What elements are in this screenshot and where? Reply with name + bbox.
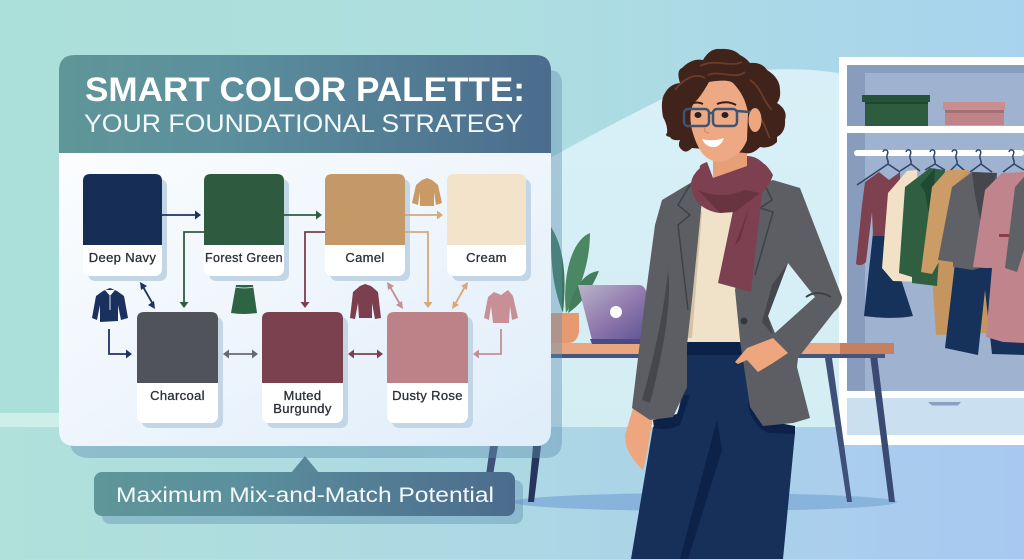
blazer side shading bbox=[762, 263, 788, 335]
arrow: camel to rose double bbox=[387, 282, 403, 309]
panel: palette bbox=[59, 55, 551, 446]
plant bbox=[551, 227, 599, 343]
hair back bbox=[662, 49, 786, 153]
eyebrows bbox=[690, 102, 736, 105]
burgundy top bbox=[856, 172, 902, 265]
top shadow bbox=[687, 206, 702, 338]
card: Muted Burgundy: Burgundy bbox=[273, 401, 332, 416]
arrow: rose blazer to dusty rose bbox=[473, 329, 501, 358]
card: Dusty Rose: Dusty Rose bbox=[392, 388, 463, 403]
drawer handle bbox=[928, 402, 961, 406]
wall base band bbox=[0, 413, 60, 428]
arrow: camel to rose bbox=[405, 232, 432, 308]
charcoal blazer collar bbox=[972, 172, 997, 220]
hangers bbox=[857, 150, 1024, 185]
camel front bbox=[921, 170, 968, 274]
pink box bbox=[943, 102, 1005, 125]
trouser under jacket shadow bbox=[653, 395, 795, 434]
arrow: navy to green bbox=[162, 210, 201, 220]
card: Deep Navy bbox=[83, 174, 162, 276]
card: Muted Burgundy: Muted bbox=[284, 388, 321, 403]
arrow: green to charcoal bbox=[180, 232, 204, 308]
panel body bbox=[59, 150, 551, 446]
card: Muted Burgundy bbox=[262, 312, 343, 423]
gap between arm and body bbox=[768, 263, 815, 333]
trousers bbox=[631, 340, 795, 559]
camel coat bbox=[921, 170, 990, 335]
cream jacket bbox=[882, 170, 922, 282]
card shadows bbox=[88, 179, 531, 428]
callout shadow bbox=[102, 480, 523, 524]
arrow: navy shirt to charcoal bbox=[109, 329, 132, 358]
card: Camel: Camel bbox=[345, 250, 385, 265]
arrow: charcoal and burgundy bbox=[223, 350, 258, 358]
right hand bbox=[735, 338, 788, 372]
floor bbox=[0, 427, 1024, 559]
panel shadow bbox=[70, 70, 562, 458]
dress belt bbox=[999, 234, 1024, 237]
callout box bbox=[94, 472, 515, 516]
glasses bbox=[684, 109, 750, 126]
nose bbox=[704, 128, 709, 133]
right charcoal jacket bbox=[1005, 177, 1024, 272]
face bbox=[690, 81, 748, 162]
cream top bbox=[686, 205, 741, 342]
card: Charcoal bbox=[137, 312, 218, 423]
card: Forest Green bbox=[204, 174, 284, 276]
plant pot bbox=[551, 313, 579, 343]
floor shadow bbox=[513, 493, 897, 511]
icon: rose blazer bbox=[484, 290, 518, 323]
navy skirt bbox=[864, 233, 913, 318]
wardrobe bbox=[839, 57, 1024, 445]
callout text: Maximum Mix-and-Match Potential bbox=[116, 483, 494, 507]
card: Deep Navy: Deep Navy bbox=[89, 250, 156, 265]
arrow: green to camel bbox=[284, 210, 322, 220]
icon: navy shirt bbox=[92, 288, 128, 322]
arrow: rose to cream double bbox=[452, 282, 468, 309]
hair highlights bbox=[675, 62, 772, 138]
icon: burgundy top bbox=[350, 284, 381, 319]
arrow: camel to cream bbox=[405, 210, 443, 220]
panel header bbox=[59, 55, 551, 153]
callout pointer bbox=[291, 456, 319, 473]
left hand bbox=[625, 408, 654, 470]
icon: camel jacket bbox=[412, 178, 442, 206]
icon: green skirt bbox=[231, 285, 257, 314]
card: Camel bbox=[325, 174, 405, 276]
neck bbox=[713, 150, 747, 178]
green jacket lapel bbox=[920, 168, 935, 220]
subtitle: YOUR FOUNDATIONAL STRATEGY bbox=[84, 110, 523, 138]
scarf bbox=[691, 156, 773, 292]
arrow: camel to burgundy bbox=[300, 232, 325, 308]
blazer bbox=[632, 180, 842, 426]
arrow: burgundy and rose bbox=[348, 350, 383, 358]
green jacket bbox=[899, 168, 945, 286]
background wall bbox=[0, 0, 1024, 430]
card: Dusty Rose bbox=[387, 312, 468, 423]
smile bbox=[702, 138, 724, 147]
laptop bbox=[578, 285, 655, 344]
callout bbox=[94, 456, 523, 524]
desk bbox=[486, 343, 895, 502]
person bbox=[625, 49, 842, 559]
hanging rail bbox=[854, 150, 1024, 156]
trouser inner shadow bbox=[680, 420, 722, 559]
ear bbox=[748, 108, 762, 132]
green box bbox=[862, 95, 930, 126]
background lighter wall curve bbox=[480, 69, 850, 430]
scarf folds bbox=[698, 190, 760, 245]
blazer left sleeve shading bbox=[642, 270, 669, 403]
pink dress bbox=[973, 172, 1024, 343]
card: Forest Green: Forest Green bbox=[205, 250, 283, 265]
waistband bbox=[686, 340, 741, 355]
card: Cream bbox=[447, 174, 526, 276]
card: Cream: Cream bbox=[466, 250, 507, 265]
arrow: navy to charcoal double bbox=[140, 282, 155, 309]
card: Charcoal: Charcoal bbox=[150, 388, 205, 403]
eyes bbox=[694, 112, 728, 118]
navy trousers bbox=[945, 225, 1024, 355]
title: SMART COLOR PALETTE: bbox=[85, 71, 525, 109]
charcoal blazer bbox=[938, 172, 997, 270]
